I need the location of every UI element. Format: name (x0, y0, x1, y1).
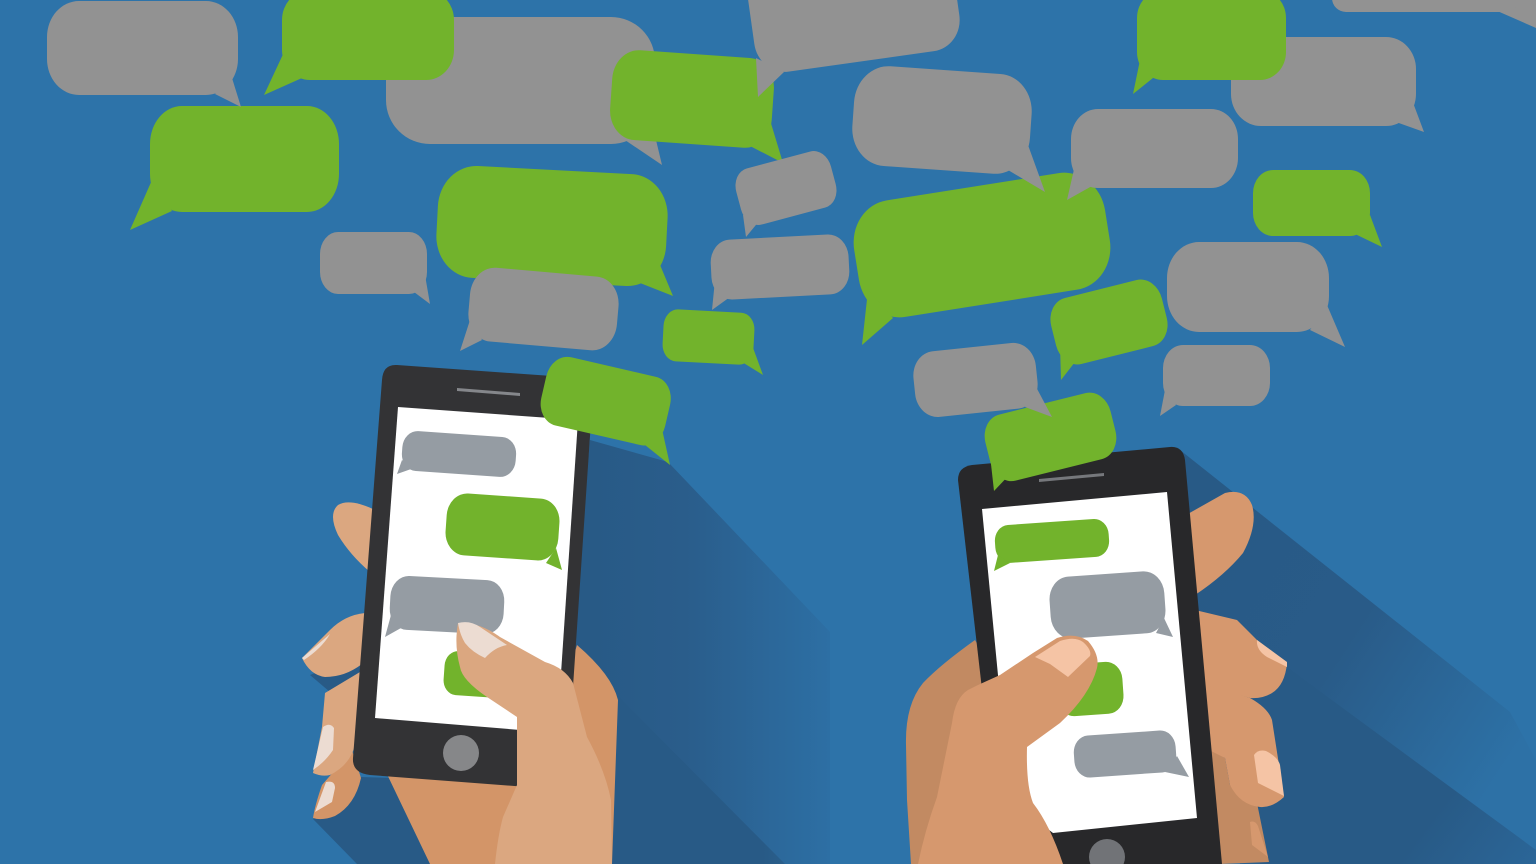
bubble: grey top left (47, 1, 241, 107)
grey speech bubbles behind (386, 17, 1424, 165)
right phone (958, 447, 1222, 864)
bubble: grey under large green (460, 266, 621, 352)
phone body (353, 365, 593, 790)
bubble: grey top right corner (1332, 0, 1536, 28)
earpiece (1039, 473, 1104, 482)
left hand palm (385, 645, 618, 864)
grey speech bubbles (47, 0, 1536, 416)
bubble: grey right small (1160, 345, 1270, 416)
nail: ring (313, 725, 334, 770)
finger shadow (310, 655, 362, 692)
left thumb nail (458, 622, 507, 658)
right thumb and hand (918, 636, 1098, 864)
bubble: green centre top (608, 48, 783, 163)
nail: middle (1257, 640, 1287, 667)
bubble: grey left small (320, 232, 430, 304)
chat bubble: grey 2 (1073, 729, 1189, 779)
home button (443, 735, 479, 771)
finger: index (333, 502, 375, 572)
phone body (958, 447, 1222, 864)
bubble: green far right (1253, 170, 1382, 247)
phone screen (982, 492, 1197, 833)
bubble: green over right phone (980, 388, 1121, 491)
bubble: green large centre (434, 164, 673, 296)
left thumb (456, 623, 612, 864)
finger: index (1186, 492, 1254, 595)
bubble: green over left phone (536, 353, 675, 465)
chat bubble: grey 2 (385, 575, 505, 637)
chat bubble: green 2 (1055, 661, 1125, 717)
chat bubble: grey 1 (1048, 570, 1173, 640)
long shadow: left phone (313, 440, 830, 864)
bubble: green small centre (662, 309, 763, 375)
finger: little (313, 750, 361, 819)
right hand fingers behind phone (1186, 492, 1287, 864)
bubble: grey centre mid (710, 233, 850, 310)
bubble: green left (130, 106, 339, 230)
left hand fingers behind phone (302, 502, 375, 819)
nail: little (1250, 822, 1268, 857)
chat bubble: green 1 (994, 518, 1110, 571)
bubble: green top left (264, 0, 454, 95)
earpiece (457, 388, 520, 396)
nail: middle (302, 634, 330, 660)
bubble: grey overlapping green (911, 341, 1052, 419)
bubble: grey right large (1167, 242, 1345, 347)
chat bubble: green 2 (443, 650, 525, 700)
left phone (353, 365, 593, 790)
bubble: grey tilted small (731, 147, 841, 237)
home button (1089, 839, 1125, 864)
long shadow: right phone (1180, 450, 1536, 864)
chat bubble: green 1 (444, 492, 562, 570)
bubble: green top right (1133, 0, 1286, 94)
chat bubble: grey 1 (397, 430, 517, 478)
finger: ring (313, 672, 360, 776)
phone screen (375, 407, 578, 733)
bubble: grey upper right (1067, 109, 1238, 200)
finger: ring (1205, 683, 1284, 807)
bubble: grey right (1231, 37, 1424, 132)
right hand palm (906, 640, 1010, 864)
bubble: green large right (847, 167, 1117, 345)
bubble: green right middle (1045, 275, 1173, 380)
bubble: grey top centre (743, 0, 964, 97)
right thumb nail (1035, 639, 1090, 677)
bubble: grey centre right (850, 64, 1045, 192)
finger: middle (1195, 610, 1287, 698)
finger: little (1205, 745, 1269, 864)
bubble: large grey (386, 17, 662, 165)
green speech bubbles (130, 0, 1382, 380)
finger: middle (302, 613, 365, 677)
nail: little (315, 782, 335, 812)
nail: ring (1254, 750, 1284, 796)
